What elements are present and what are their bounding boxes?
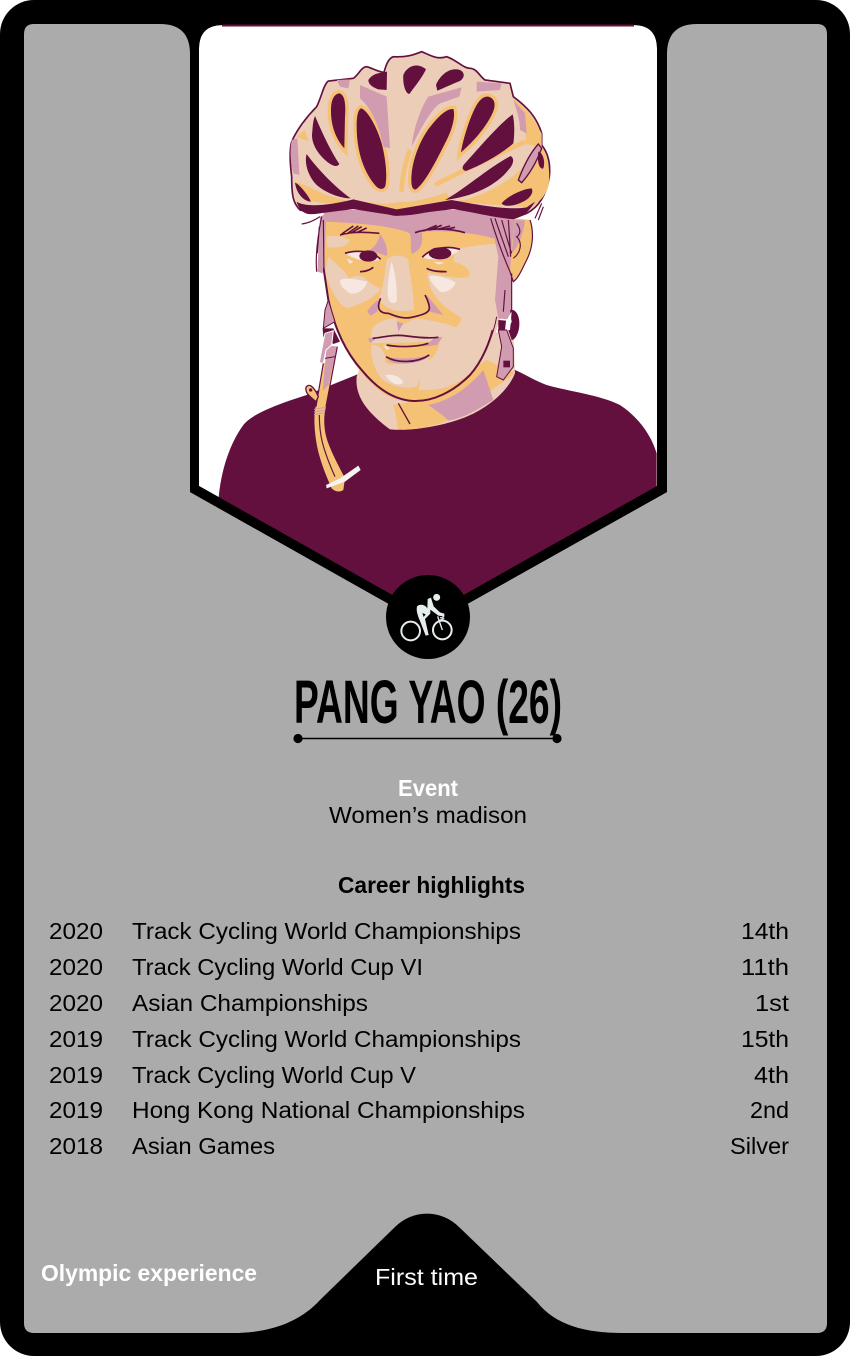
helmet pink shading bbox=[291, 79, 527, 175]
eyes bbox=[345, 247, 460, 261]
face pink shading bbox=[323, 210, 510, 364]
career highlights table: 2020 bbox=[49, 990, 103, 1016]
career highlights table: Asian Games bbox=[132, 1133, 275, 1159]
helmet band bbox=[297, 199, 535, 219]
name underline bbox=[293, 734, 562, 743]
career highlights table: 15th bbox=[741, 1026, 789, 1052]
left helmet strap bbox=[306, 300, 361, 492]
nose and mouth lines bbox=[379, 295, 429, 318]
left hair bbox=[302, 213, 327, 273]
career highlights table: 1st bbox=[755, 990, 789, 1016]
hair, ear and right strap bbox=[470, 203, 543, 380]
athlete name: PANG YAO (26) bbox=[294, 668, 562, 736]
portrait frame bbox=[190, 24, 667, 626]
event: Event bbox=[398, 775, 458, 801]
face bbox=[323, 210, 510, 401]
career highlights table: Track Cycling World Cup VI bbox=[132, 954, 423, 980]
portrait illustration bbox=[218, 52, 657, 620]
career highlights table bbox=[49, 918, 789, 1159]
portrait top edge bbox=[222, 24, 634, 26]
career highlights table: 4th bbox=[754, 1062, 789, 1088]
career highlights table: 2020 bbox=[49, 918, 103, 944]
career highlights table: Silver bbox=[730, 1133, 789, 1159]
career highlights table: 2019 bbox=[49, 1097, 103, 1123]
career highlights table: 11th bbox=[741, 954, 789, 980]
career highlights table: 2019 bbox=[49, 1026, 103, 1052]
career highlights table: Track Cycling World Cup V bbox=[132, 1062, 416, 1088]
career highlights heading: Career highlights bbox=[338, 872, 525, 898]
olympic experience value: First time bbox=[375, 1264, 478, 1290]
sport badge: cycling icon bbox=[386, 575, 470, 659]
career highlights table: Hong Kong National Championships bbox=[132, 1097, 525, 1123]
event: Women’s madison bbox=[329, 802, 527, 828]
portrait panel bbox=[199, 25, 657, 615]
face peach patches bbox=[325, 236, 507, 390]
career highlights table: 14th bbox=[741, 918, 789, 944]
neck bbox=[356, 330, 515, 430]
face highlights bbox=[340, 258, 456, 384]
career highlights table: 2019 bbox=[49, 1062, 103, 1088]
eyebrows bbox=[340, 225, 465, 235]
shirt bbox=[218, 330, 657, 620]
helmet orange shading bbox=[295, 98, 549, 209]
olympic experience label: Olympic experience bbox=[41, 1260, 257, 1286]
event bbox=[329, 775, 527, 828]
jaw line bbox=[323, 267, 493, 401]
athlete name bbox=[293, 668, 562, 743]
helmet vents bbox=[295, 66, 544, 206]
career highlights table: 2018 bbox=[49, 1133, 103, 1159]
career highlights table: Track Cycling World Championships bbox=[132, 918, 521, 944]
helmet bbox=[290, 52, 550, 219]
career highlights table: Asian Championships bbox=[132, 990, 368, 1016]
career highlights table: 2020 bbox=[49, 954, 103, 980]
career highlights table: 2nd bbox=[750, 1097, 789, 1123]
career highlights table: Track Cycling World Championships bbox=[132, 1026, 521, 1052]
